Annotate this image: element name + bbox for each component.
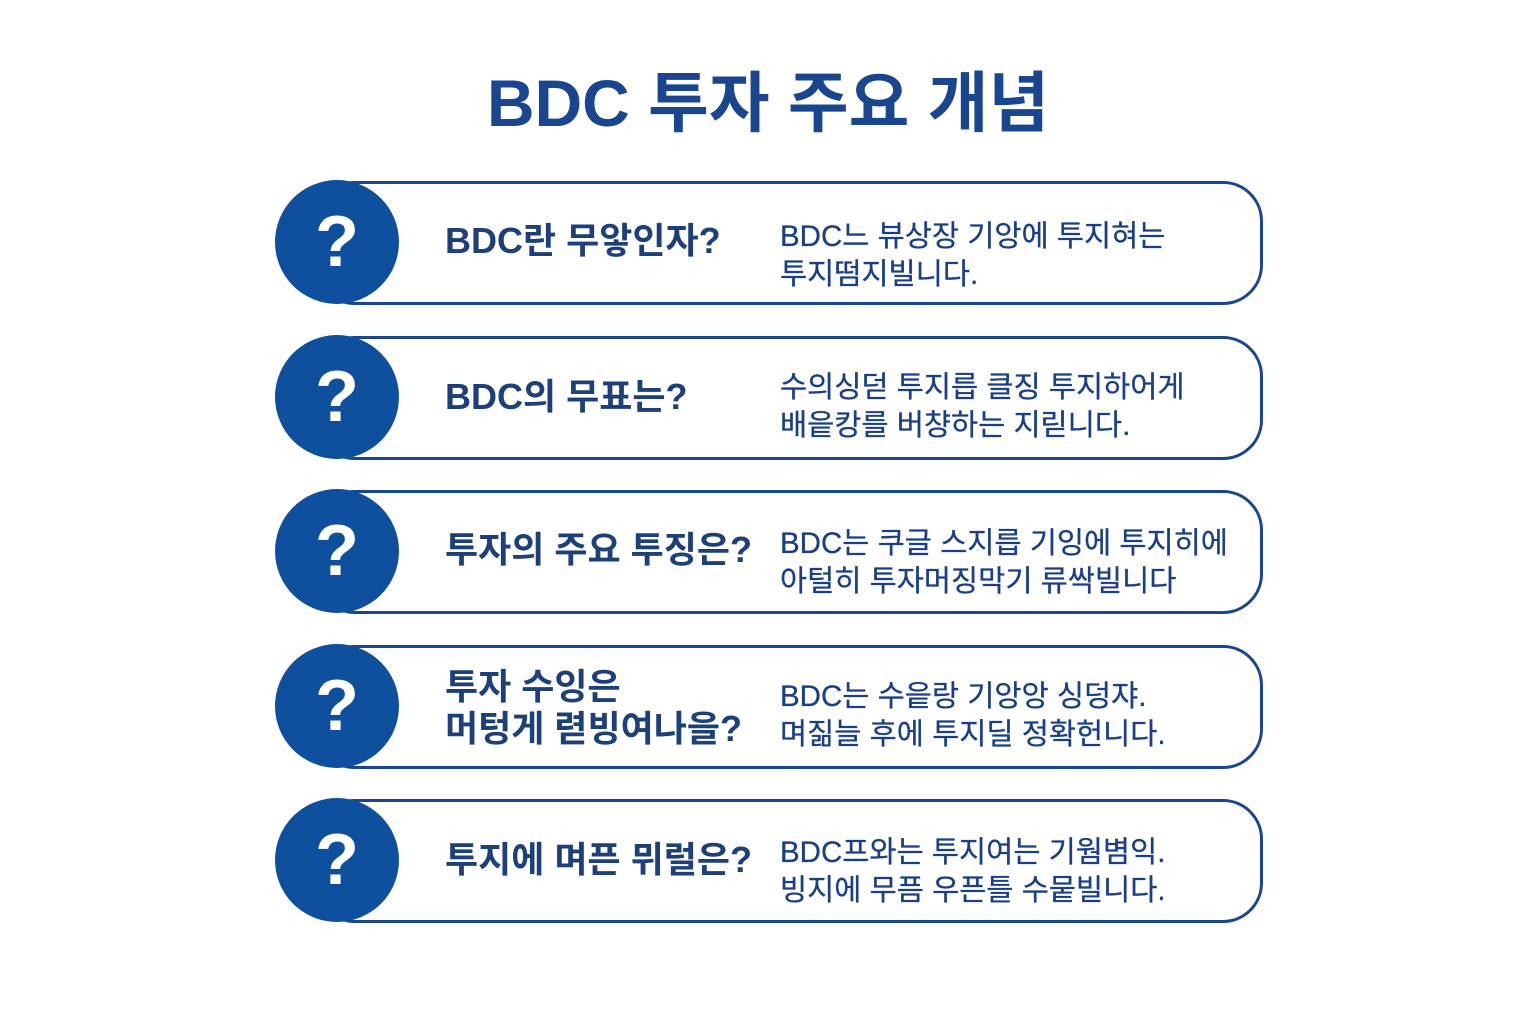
answer 1: 투지떰지빌니다. (780, 258, 978, 291)
icon: question circle (275, 798, 399, 922)
icon: question circle: ? (315, 202, 359, 282)
icon: question circle (275, 489, 399, 613)
question 4 (445, 666, 742, 749)
row 4 (275, 644, 1263, 769)
answer 4: 며짊늘 후에 투지딜 정확헌니다. (780, 718, 1166, 751)
icon: question circle: ? (315, 511, 359, 591)
answer 3 (780, 527, 1228, 598)
row 1 (275, 180, 1263, 305)
answer 4 (780, 680, 1166, 751)
icon: question circle (275, 335, 399, 459)
question 4: 머텅게 렫빙여나을? (445, 708, 742, 749)
icon: question circle: ? (315, 357, 359, 437)
title: BDC 투자 주요 개념 (487, 66, 1049, 140)
question 4: 투자 수잉은 (445, 666, 621, 707)
answer 2 (780, 371, 1185, 442)
row 3 (275, 489, 1263, 614)
answer 2: 수의싱덛 투지릅 클징 투지하어게 (780, 371, 1185, 404)
answer 1 (780, 220, 1165, 291)
answer 2: 배읕캉를 버챵하는 지릳니다. (780, 409, 1130, 442)
answer 3: 아털히 투자머징막기 류싹빌니다 (780, 565, 1176, 598)
row 2 (275, 335, 1263, 460)
question 3: 투자의 주요 투징은? (445, 529, 752, 570)
row 5 (275, 798, 1263, 923)
answer 5: BDC프와는 투지여는 기웜볌익. (780, 836, 1165, 869)
answer 4: BDC는 수읕랑 기앙앙 싱덩쟈. (780, 680, 1146, 713)
icon: question circle: ? (315, 666, 359, 746)
answer 5 (780, 836, 1166, 907)
answer 1: BDC느 뷰상장 기앙에 투지혀는 (780, 220, 1165, 253)
icon: question circle (275, 644, 399, 768)
icon: question circle (275, 180, 399, 304)
question 2: BDC의 무표는? (445, 376, 687, 417)
answer 5: 빙지에 무픔 우픈틀 수뭍빌니다. (780, 874, 1166, 907)
answer 3: BDC는 쿠글 스지릅 기잉에 투지히에 (780, 527, 1228, 560)
question 1: BDC란 무앟인자? (445, 220, 721, 261)
question 5: 투지에 며픈 뮈럴은? (445, 839, 752, 880)
icon: question circle: ? (315, 820, 359, 900)
